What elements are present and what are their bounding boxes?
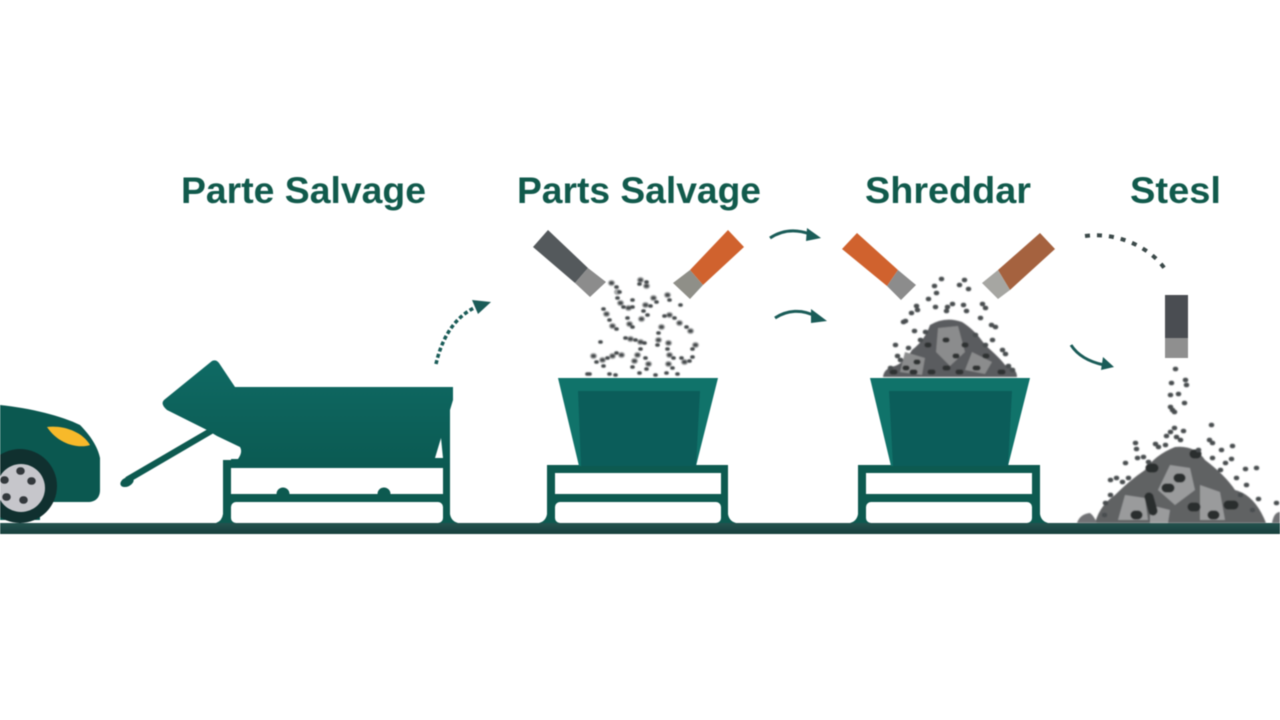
machine: shredder hopper [850, 378, 1048, 523]
magnet: brown right [982, 233, 1055, 299]
arrow: dotted arc to steel [1085, 235, 1165, 269]
heading: Parte Salvage: Parte Salvage [181, 170, 426, 211]
magnet: vertical grey [1165, 295, 1188, 358]
machine: tipping conveyor [119, 360, 458, 523]
icon: car [0, 405, 100, 523]
magnet: orange left [842, 233, 916, 300]
magnet: orange right [673, 230, 744, 299]
particles: falling steel and pile [1077, 369, 1280, 523]
arrow: lower to shredder [775, 309, 827, 323]
heading: Stesl: Stesl [1130, 170, 1221, 211]
heading: Parts Salvage: Parts Salvage [517, 170, 761, 211]
particles: pile in shredder hopper [883, 279, 1017, 377]
heading: Shreddar: Shreddar [865, 170, 1031, 211]
arrow: upper to shredder [770, 228, 821, 241]
particles: falling scrap over hopper [587, 280, 696, 375]
ground line [0, 523, 1280, 534]
magnet: grey left [533, 230, 606, 297]
machine: magnet hopper [539, 378, 736, 523]
arrow: to parts salvage [436, 300, 491, 364]
arrow: down to steel pile [1071, 345, 1114, 370]
